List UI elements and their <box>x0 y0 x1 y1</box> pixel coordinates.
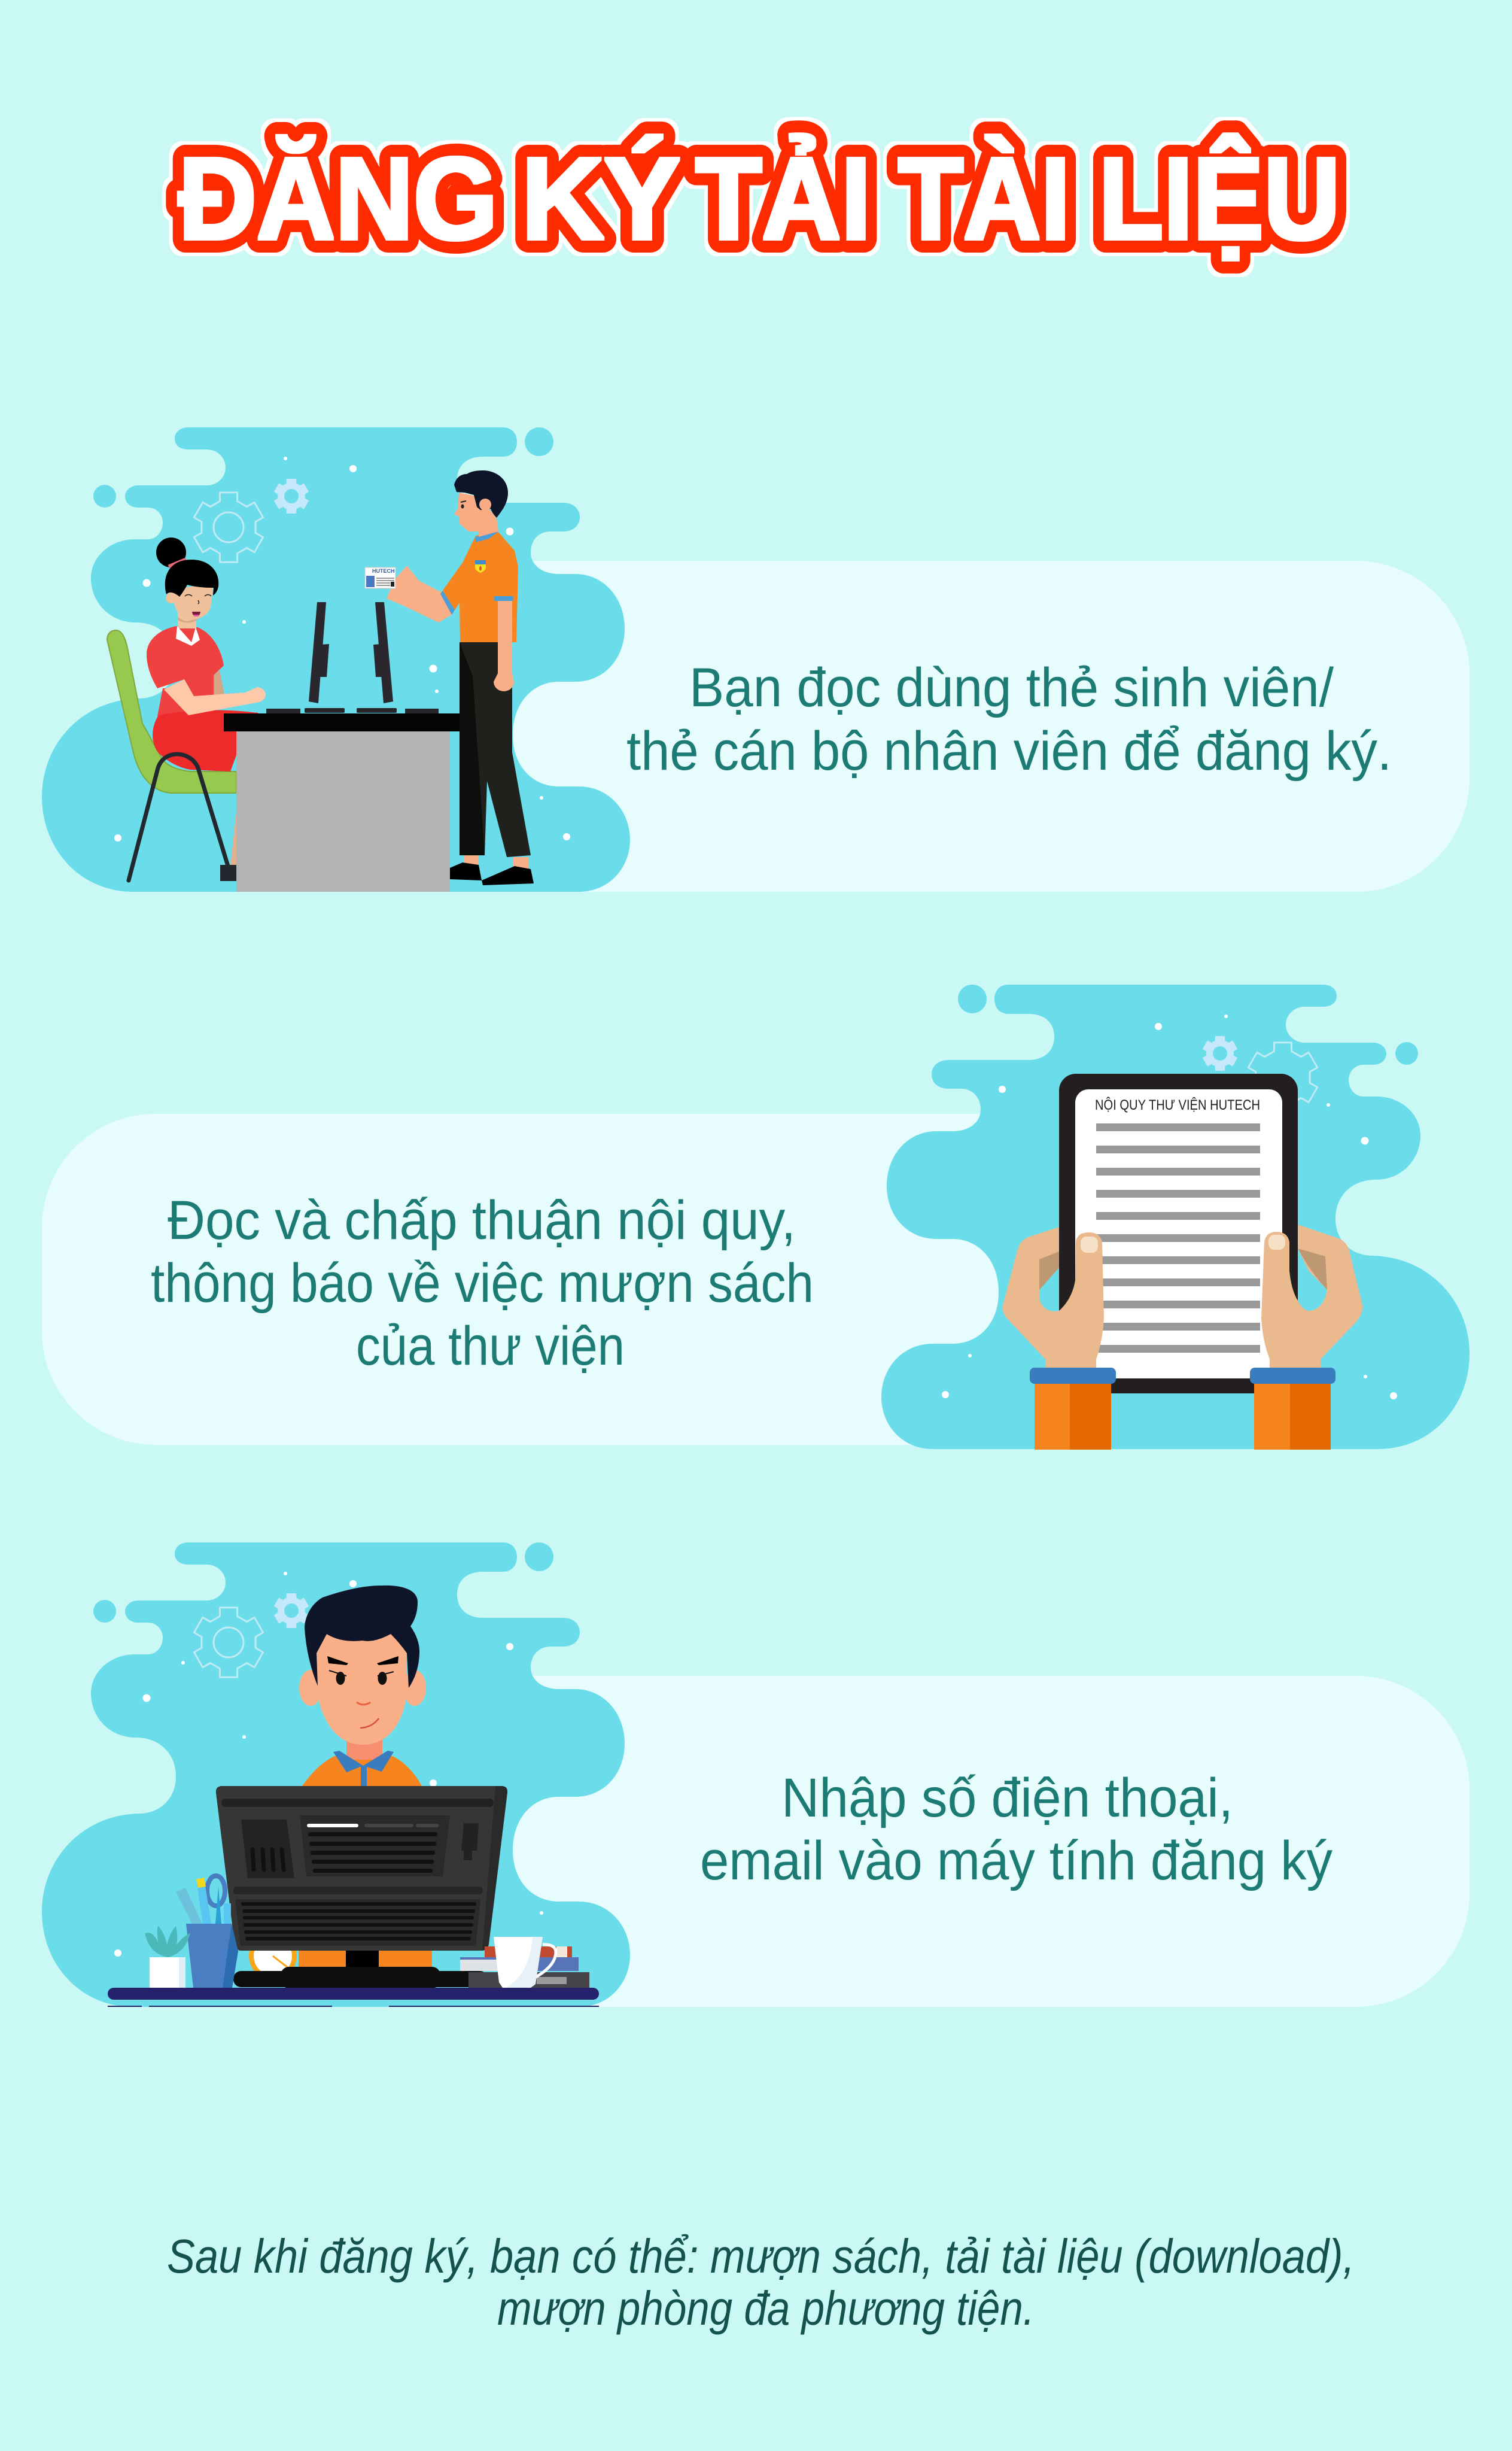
lower body <box>299 1951 432 1969</box>
woman <box>147 537 266 881</box>
title <box>178 133 1340 264</box>
gears <box>1204 1037 1318 1112</box>
footer note: Sau khi đăng ký, bạn có thể: mượn sách, tải tài liệu (download), <box>167 2230 1355 2283</box>
id card <box>365 567 396 588</box>
illustration: step 3 computer user <box>42 1542 630 2007</box>
left hand <box>1003 1227 1104 1371</box>
desk <box>224 713 462 892</box>
gears <box>194 479 308 562</box>
shirt logo <box>475 560 486 573</box>
title: TÀI <box>898 133 1070 264</box>
footer note: mượn phòng đa phương tiện. <box>497 2282 1035 2335</box>
title: TẢI <box>695 133 871 264</box>
monitor base <box>233 1967 488 1988</box>
right cuff and sleeve <box>1250 1368 1335 1450</box>
desk top <box>108 1988 599 2000</box>
mug <box>494 1937 556 1988</box>
text: step 2 <box>151 1190 814 1377</box>
desk shadow lines <box>108 2006 599 2007</box>
text: step 1: Bạn đọc dùng thẻ sinh viên/ <box>689 657 1334 718</box>
text: step 1 <box>626 657 1392 782</box>
monitor <box>216 1786 507 1951</box>
text: step 2: thông báo về việc mượn sách <box>151 1253 814 1314</box>
text: step 3: Nhập số điện thoại, <box>781 1767 1233 1829</box>
clock <box>249 1932 297 1980</box>
illustration: step 2 tablet <box>881 985 1470 1450</box>
blob background <box>42 1542 630 2007</box>
panel: step 2 background <box>42 1114 1093 1445</box>
tablet <box>1059 1074 1298 1393</box>
blob background <box>42 427 630 892</box>
text: step 1: thẻ cán bộ nhân viên để đăng ký. <box>626 721 1392 782</box>
title: KÝ <box>521 133 680 264</box>
blob background <box>881 985 1470 1449</box>
illustration: step 1 registration desk <box>42 427 630 892</box>
man with card <box>365 470 534 885</box>
footer note <box>167 2230 1355 2335</box>
tablet: NỘI QUY THƯ VIỆN HUTECH <box>1095 1097 1260 1113</box>
text: step 3 <box>700 1767 1332 1891</box>
text: step 2: của thư viện <box>356 1316 625 1377</box>
gears <box>194 1594 308 1677</box>
title: LIỆU <box>1099 133 1340 264</box>
books <box>460 1946 589 1988</box>
man <box>299 1586 426 1786</box>
plant <box>145 1926 190 1988</box>
sparkle dots <box>942 1015 1397 1399</box>
sparkle dots <box>114 1572 543 1957</box>
monitors <box>309 602 393 703</box>
chair <box>107 630 236 793</box>
panel: step 1 background <box>419 561 1470 892</box>
pen cup <box>176 1876 238 1988</box>
monitor stand <box>346 1951 379 1969</box>
text: step 2: Đọc và chấp thuận nội quy, <box>168 1190 796 1251</box>
sparkle dots <box>114 457 570 842</box>
title: ĐĂNG <box>178 133 498 264</box>
text: step 3: email vào máy tính đăng ký <box>700 1830 1332 1891</box>
id card: HUTECH <box>372 568 395 574</box>
panel: step 3 background <box>419 1676 1470 2007</box>
keyboards <box>266 708 439 713</box>
chair leg <box>129 754 228 880</box>
right hand <box>1261 1225 1362 1371</box>
left cuff and sleeve <box>1030 1368 1116 1450</box>
